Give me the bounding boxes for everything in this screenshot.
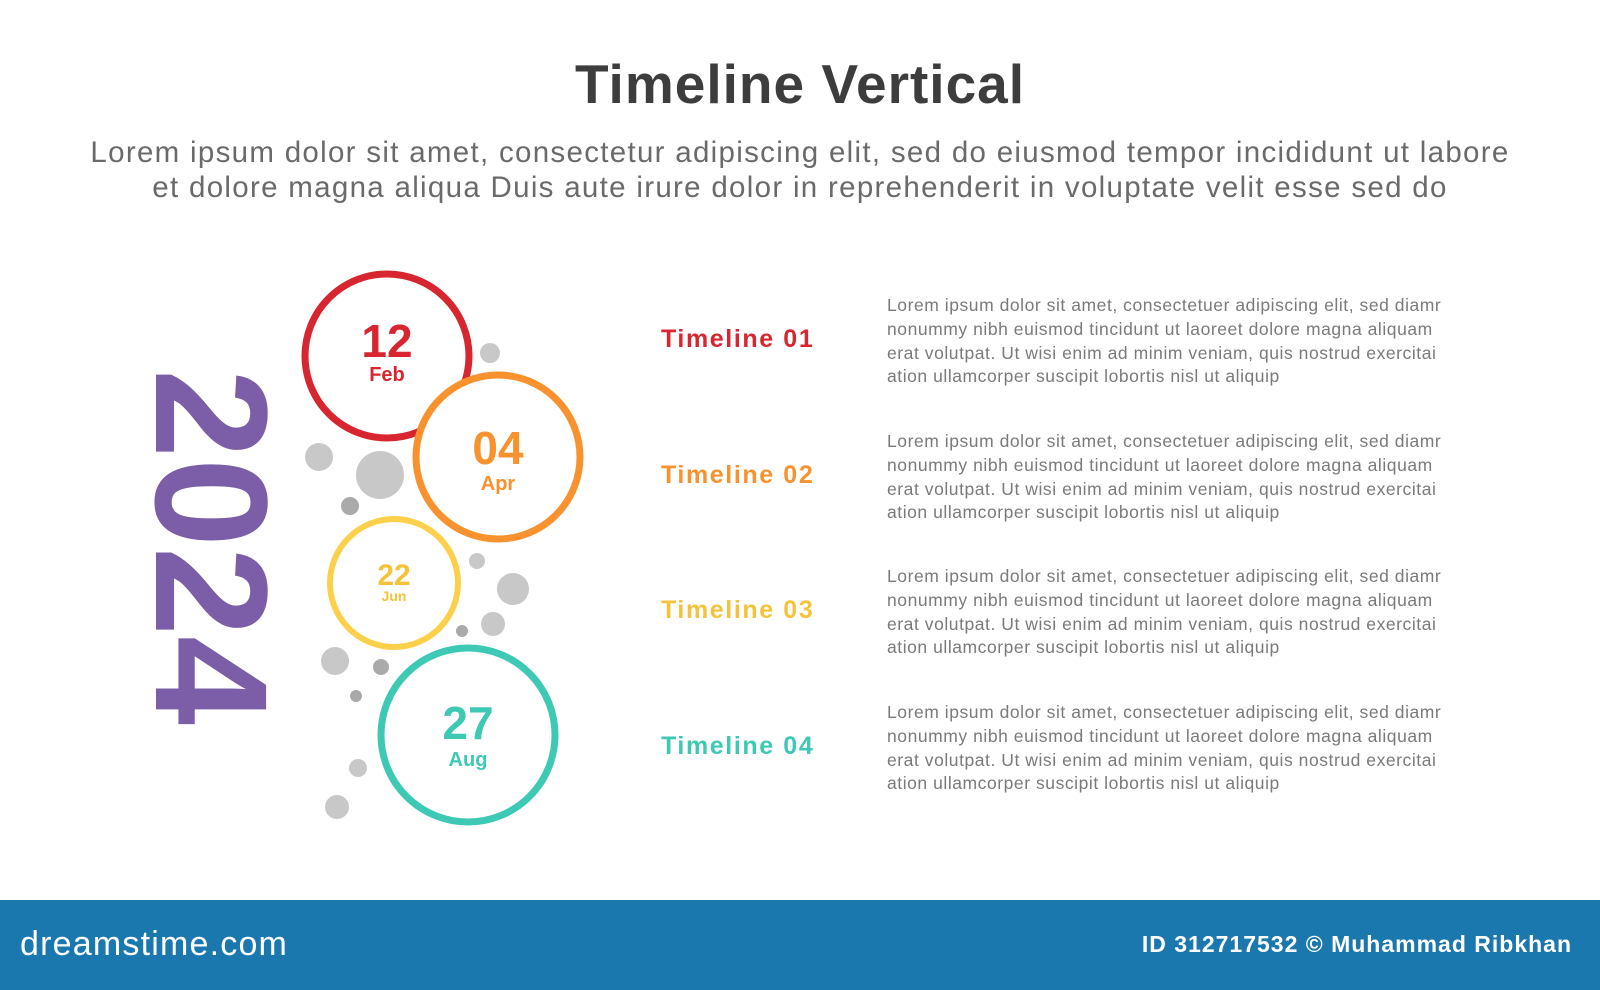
text 1: nonummy nibh euismod tincidunt ut laoreet dolore magna aliquam: [887, 319, 1433, 339]
circle 4: Aug: [449, 749, 487, 771]
text 3: erat volutpat. Ut wisi enim ad minim veniam, quis nostrud exercitai: [887, 614, 1436, 634]
text 1: Lorem ipsum dolor sit amet, consectetuer adipiscing elit, sed diamr: [887, 295, 1441, 315]
text 4: ation ullamcorper suscipit lobortis nisl ut aliquip: [887, 773, 1280, 793]
gray dots: [305, 343, 529, 819]
label 4: Timeline 04: [661, 732, 814, 760]
text 3: nonummy nibh euismod tincidunt ut laoreet dolore magna aliquam: [887, 590, 1433, 610]
circle 4: 27: [442, 697, 494, 749]
label 3: Timeline 03: [661, 596, 814, 624]
year 2024: 2024: [122, 369, 301, 725]
text 4: nonummy nibh euismod tincidunt ut laoreet dolore magna aliquam: [887, 726, 1433, 746]
circle 3: 22: [377, 559, 411, 592]
text 2: nonummy nibh euismod tincidunt ut laoreet dolore magna aliquam: [887, 455, 1433, 475]
text 1: [887, 295, 1441, 386]
circle 4: [381, 648, 555, 822]
circle 1: Feb: [369, 364, 405, 386]
circle 3: [330, 519, 458, 647]
circle 2: Apr: [481, 473, 515, 495]
graphic: circles timeline: [122, 270, 584, 826]
text 1: ation ullamcorper suscipit lobortis nisl ut aliquip: [887, 366, 1280, 386]
circle 1: 12: [361, 315, 413, 367]
subtitle: et dolore magna aliqua Duis aute irure dolor in reprehenderit in voluptate velit esse sed do: [152, 171, 1448, 204]
subtitle: Lorem ipsum dolor sit amet, consectetur adipiscing elit, sed do eiusmod tempor incididunt ut labore: [90, 136, 1510, 169]
text 2: [887, 431, 1441, 522]
text 2: erat volutpat. Ut wisi enim ad minim veniam, quis nostrud exercitai: [887, 479, 1436, 499]
text 2: Lorem ipsum dolor sit amet, consectetuer adipiscing elit, sed diamr: [887, 431, 1441, 451]
label 1: Timeline 01: [661, 325, 814, 353]
title: Timeline Vertical: [575, 53, 1025, 115]
footer credit: ID 312717532 © Muhammad Ribkhan: [1142, 931, 1572, 957]
circle 1: [305, 274, 469, 438]
text 2: ation ullamcorper suscipit lobortis nisl ut aliquip: [887, 502, 1280, 522]
subtitle: [90, 136, 1510, 204]
footer logo: dreamstime.com: [20, 925, 288, 963]
text 3: [887, 566, 1441, 657]
text 3: Lorem ipsum dolor sit amet, consectetuer adipiscing elit, sed diamr: [887, 566, 1441, 586]
footer bar: [0, 900, 1600, 990]
text 4: [887, 702, 1441, 793]
circle 2: [416, 375, 580, 539]
text 3: ation ullamcorper suscipit lobortis nisl ut aliquip: [887, 637, 1280, 657]
circle 3: Jun: [382, 588, 406, 604]
text 4: erat volutpat. Ut wisi enim ad minim veniam, quis nostrud exercitai: [887, 750, 1436, 770]
text 4: Lorem ipsum dolor sit amet, consectetuer adipiscing elit, sed diamr: [887, 702, 1441, 722]
text 1: erat volutpat. Ut wisi enim ad minim veniam, quis nostrud exercitai: [887, 343, 1436, 363]
label 2: Timeline 02: [661, 461, 814, 489]
circle 2: 04: [472, 422, 524, 474]
